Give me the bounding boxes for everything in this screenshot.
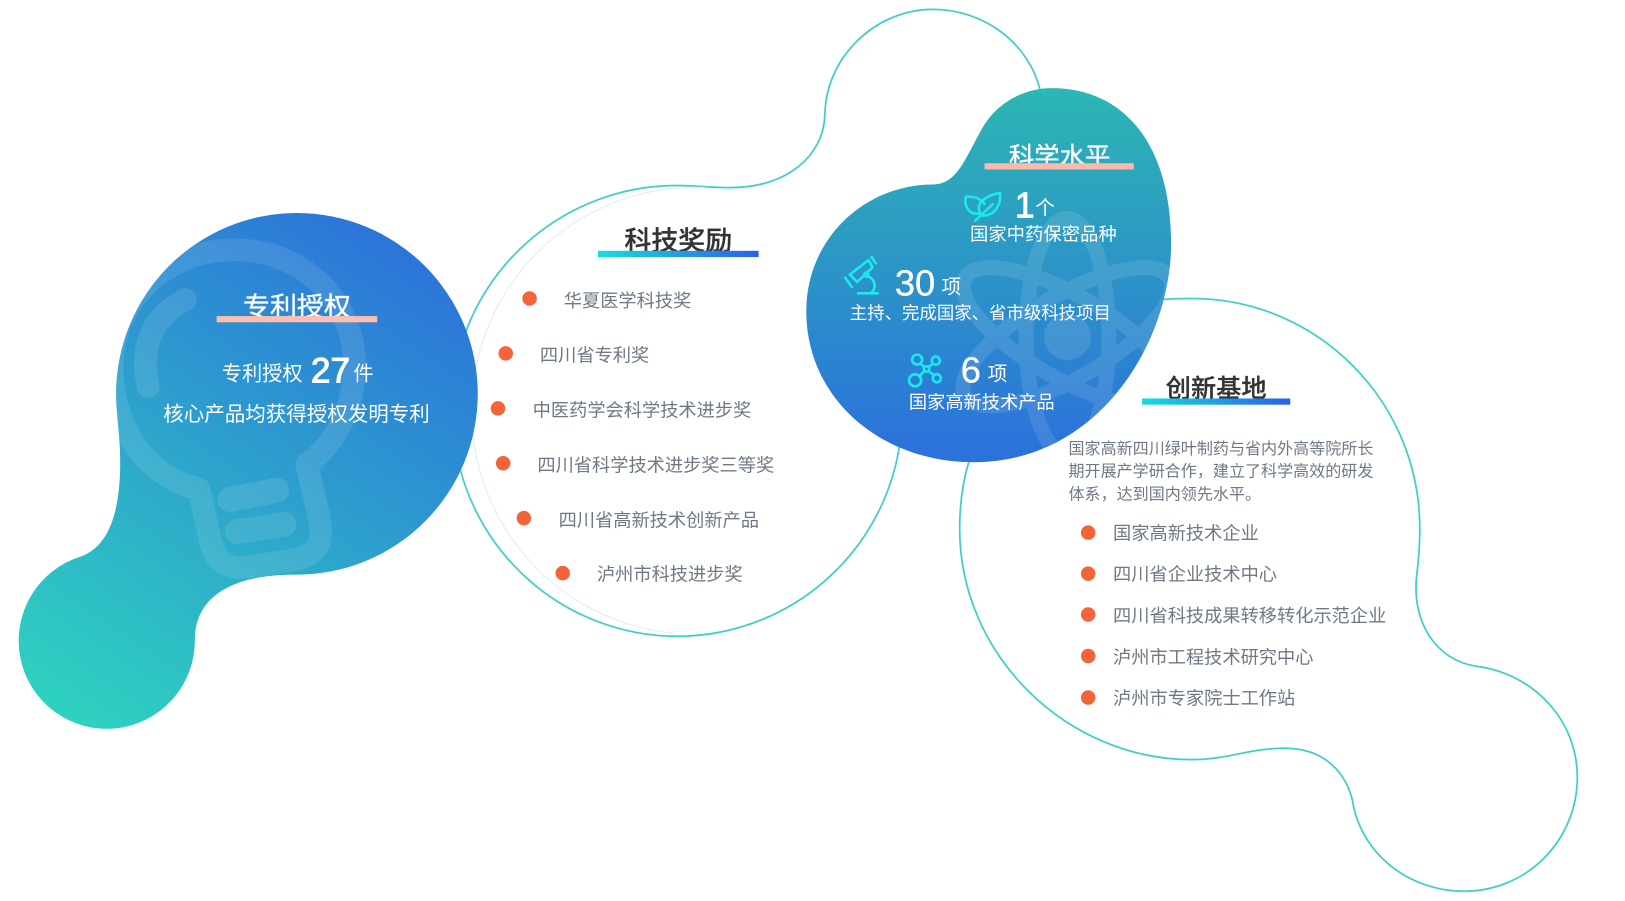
heading: science: 科学水平 bbox=[1009, 143, 1110, 171]
text: innovation description bbox=[1068, 440, 1373, 504]
decorative inner arc for awards bbox=[472, 187, 705, 633]
text: innovation description: 国家高新四川绿叶制药与省内外高等院所长 bbox=[1068, 440, 1373, 458]
outline: awards circle and top loop bbox=[457, 9, 1040, 636]
icon: leaf bbox=[965, 193, 1000, 221]
text: projects note: 主持、完成国家、省市级科技项目 bbox=[850, 303, 1111, 323]
list: innovation platforms: 泸州市工程技术研究中心 bbox=[1113, 646, 1313, 667]
panel: innovation base bbox=[1068, 375, 1386, 709]
list: awards: 中医药学会科学技术进步奖 bbox=[533, 400, 751, 421]
text: products note: 国家高新技术产品 bbox=[909, 391, 1055, 412]
list: innovation platforms: 泸州市专家院士工作站 bbox=[1113, 688, 1295, 709]
text: innovation description: 体系，达到国内领先水平。 bbox=[1068, 486, 1261, 504]
text: variety note: 国家中药保密品种 bbox=[970, 223, 1117, 244]
list: innovation platforms: 四川省科技成果转移转化示范企业 bbox=[1113, 605, 1386, 626]
panel: science awards bbox=[491, 226, 774, 584]
stat: patents count bbox=[222, 351, 374, 390]
list: awards: 华夏医学科技奖 bbox=[564, 290, 691, 311]
icon: atom watermark bbox=[956, 211, 1170, 448]
text: patents note: 核心产品均获得授权发明专利 bbox=[163, 403, 430, 426]
stat: six products: 项 bbox=[988, 363, 1007, 385]
list: awards: 四川省科学技术进步奖三等奖 bbox=[537, 455, 774, 476]
stat: thirty projects: 30 bbox=[895, 262, 935, 303]
stat: six products: 6 bbox=[961, 349, 981, 390]
list: awards: 泸州市科技进步奖 bbox=[597, 563, 743, 584]
list: awards: 四川省高新技术创新产品 bbox=[559, 509, 759, 530]
text: innovation description: 期开展产学研合作，建立了科学高效的研发 bbox=[1068, 463, 1373, 481]
list: innovation platforms: 国家高新技术企业 bbox=[1113, 522, 1259, 543]
heading underline bbox=[217, 316, 377, 322]
list: awards: 四川省专利奖 bbox=[540, 345, 649, 366]
stat: one variety bbox=[1015, 185, 1055, 226]
blob: patents background bbox=[19, 213, 478, 729]
heading: patents: 专利授权 bbox=[243, 292, 351, 322]
stat: six products bbox=[961, 349, 1007, 390]
stat: thirty projects: 项 bbox=[942, 276, 961, 298]
stat: patents count: 27 bbox=[311, 351, 350, 390]
list: innovation platforms: 四川省企业技术中心 bbox=[1113, 563, 1277, 584]
list: awards bbox=[491, 290, 774, 584]
heading underline bbox=[985, 163, 1134, 169]
heading underline bbox=[1142, 398, 1290, 405]
stat: thirty projects bbox=[895, 262, 961, 303]
icon: network bbox=[909, 355, 941, 386]
panel: scientific level bbox=[806, 88, 1190, 462]
stat: patents count: 件 bbox=[353, 362, 374, 385]
heading: awards: 科技奖励 bbox=[624, 226, 732, 256]
icon: microscope bbox=[845, 257, 878, 293]
stat: one variety: 个 bbox=[1035, 198, 1055, 220]
blob: science background bbox=[806, 88, 1171, 462]
icon: light bulb watermark bbox=[112, 250, 354, 567]
stat: one variety: 1 bbox=[1015, 185, 1035, 226]
list: innovation platforms bbox=[1081, 522, 1386, 709]
panel: patents bbox=[19, 213, 478, 729]
outline: innovation base blob bbox=[960, 298, 1577, 891]
stat: patents count: 专利授权 bbox=[222, 362, 303, 385]
heading underline bbox=[598, 251, 759, 257]
heading: innovation: 创新基地 bbox=[1166, 375, 1267, 403]
